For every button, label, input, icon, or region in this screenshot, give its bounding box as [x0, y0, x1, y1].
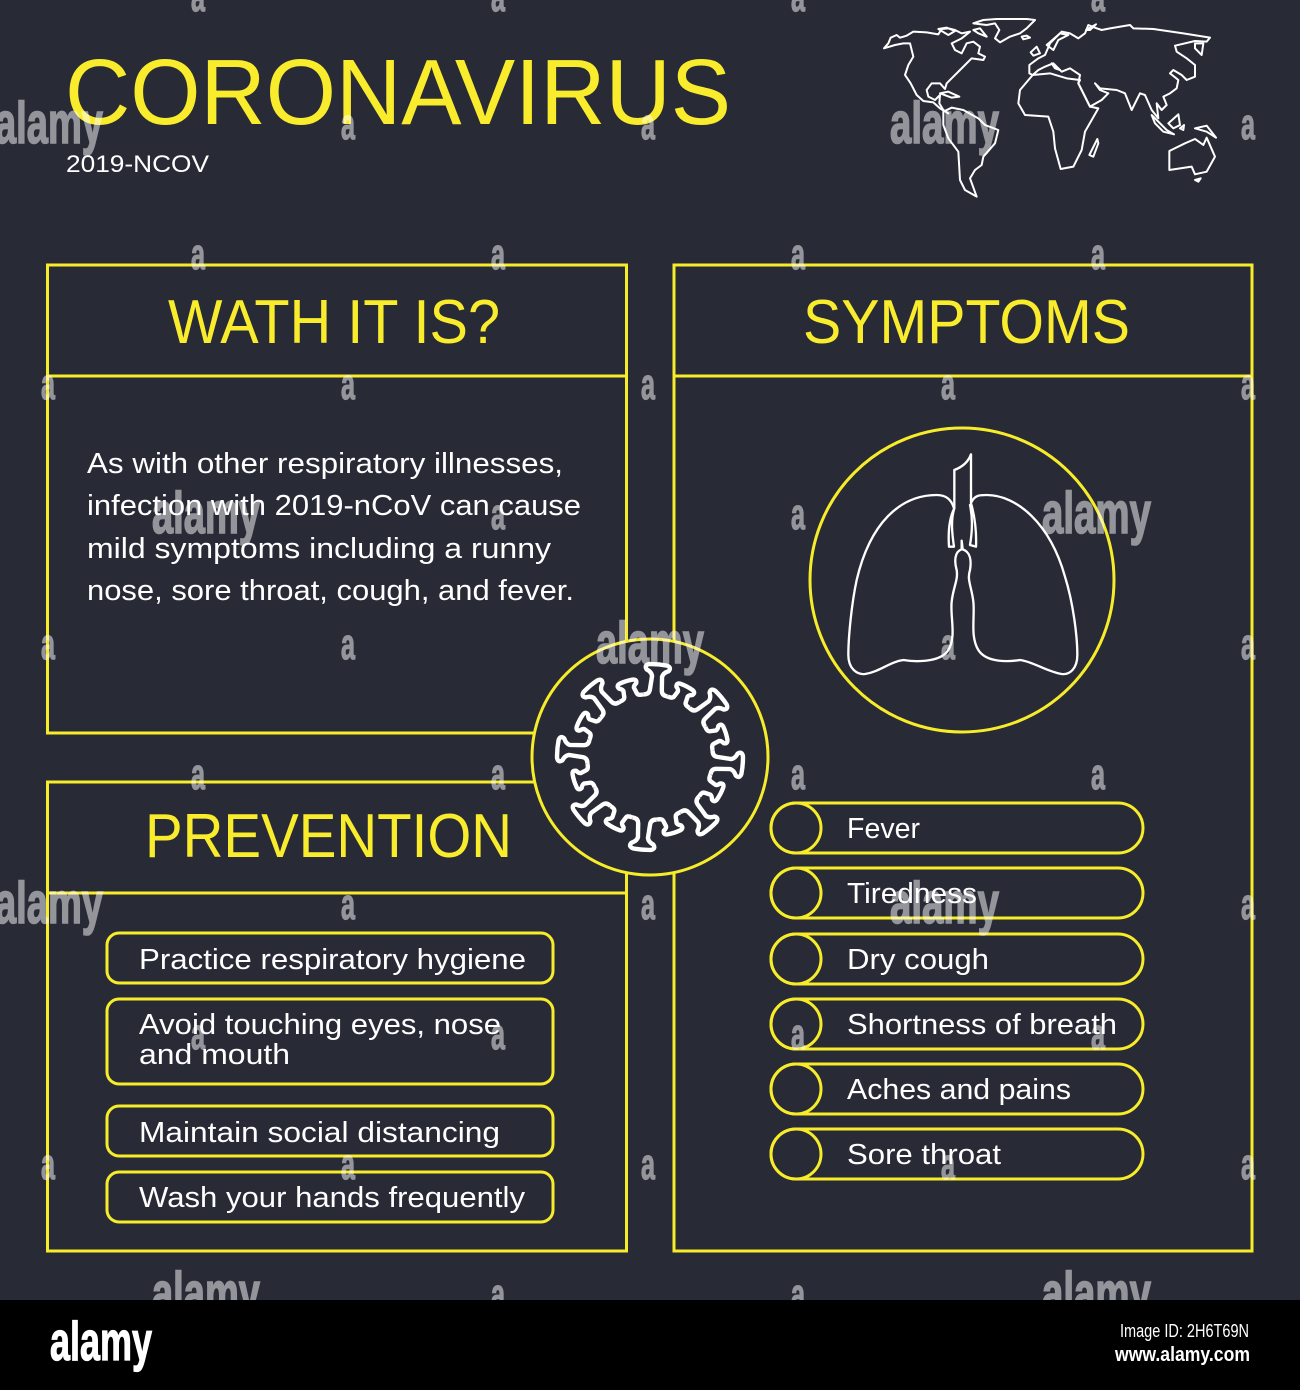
watermarks: a — [491, 1010, 505, 1059]
watermarks: a — [491, 490, 505, 539]
panel: what it is — [48, 265, 626, 733]
watermarks: a — [41, 1140, 55, 1189]
tip: avoid touching face — [107, 999, 553, 1084]
footer logo: alamy — [50, 1310, 152, 1372]
watermarks: alamy — [152, 481, 260, 546]
icon: virus in centre circle — [532, 639, 768, 875]
symptom: sore throat: Sore throat — [847, 1139, 1001, 1171]
image id: Image ID: 2H6T69N — [1120, 1321, 1249, 1341]
watermarks: a — [791, 230, 805, 279]
watermarks: a — [491, 1270, 505, 1319]
watermarks: a — [491, 230, 505, 279]
symptom: sore throat — [771, 1129, 1143, 1179]
watermarks: alamy — [1042, 1261, 1151, 1326]
symptom: fever: Fever — [847, 813, 920, 845]
tip: social distancing — [107, 1106, 553, 1156]
subtitle: 2019-NCOV — [66, 151, 209, 178]
symptom: tiredness — [771, 868, 1143, 918]
watermarks: a — [191, 230, 205, 279]
watermarks: a — [641, 1140, 655, 1189]
watermarks: a — [941, 360, 955, 409]
text block: description: As with other respiratory illnesses, — [87, 448, 563, 480]
text block: description: infection with 2019-nCoV can cause — [87, 490, 581, 522]
watermarks: alamy — [890, 91, 999, 156]
watermarks: a — [641, 360, 655, 409]
watermarks: a — [1091, 750, 1105, 799]
symptom: aches and pains — [771, 1064, 1143, 1114]
tip: respiratory hygiene — [107, 933, 553, 983]
heading: symptoms: SYMPTOMS — [803, 288, 1130, 357]
watermarks: a — [791, 750, 805, 799]
icon: world map — [884, 19, 1216, 197]
watermarks: a — [1091, 230, 1105, 279]
tip: social distancing: Maintain social distancing — [139, 1117, 500, 1149]
watermarks: a — [41, 360, 55, 409]
symptom: fever — [771, 803, 1143, 853]
watermarks: a — [941, 1140, 955, 1189]
tip: avoid touching face: and mouth — [139, 1039, 290, 1071]
heading: what it is: WATH IT IS? — [168, 288, 500, 357]
tip: avoid touching face: Avoid touching eyes, nose — [139, 1009, 501, 1041]
watermarks: alamy — [596, 611, 704, 676]
watermarks: a — [341, 620, 355, 669]
text block: description: nose, sore throat, cough, and fever. — [87, 575, 574, 607]
symptom: shortness of breath: Shortness of breath — [847, 1009, 1117, 1041]
watermarks: a — [641, 880, 655, 929]
watermarks: alamy — [1042, 481, 1151, 546]
watermarks: alamy — [152, 1261, 260, 1326]
watermarks: a — [1241, 1140, 1255, 1189]
title: CORONAVIRUS — [65, 40, 731, 144]
watermarks: a — [191, 750, 205, 799]
watermarks: a — [641, 100, 655, 149]
watermarks: a — [1091, 1010, 1105, 1059]
watermarks: a — [1241, 360, 1255, 409]
panel: prevention — [48, 782, 626, 1251]
panel: symptoms — [674, 265, 1252, 1251]
watermarks: a — [341, 100, 355, 149]
tip: respiratory hygiene: Practice respiratory hygiene — [139, 944, 526, 976]
footer bar — [0, 1300, 1300, 1390]
watermarks: a — [941, 620, 955, 669]
symptom: shortness of breath — [771, 999, 1143, 1049]
watermarks: a — [1241, 620, 1255, 669]
symptom: dry cough: Dry cough — [847, 944, 989, 976]
website: www.alamy.com — [1114, 1344, 1250, 1366]
watermarks: a — [491, 750, 505, 799]
watermarks: a — [791, 1010, 805, 1059]
tip: wash hands — [107, 1172, 553, 1222]
watermarks: a — [341, 1140, 355, 1189]
tip: wash hands: Wash your hands frequently — [139, 1182, 526, 1214]
heading: prevention: PREVENTION — [145, 802, 512, 871]
text block: description: mild symptoms including a runny — [87, 533, 552, 565]
watermarks: a — [191, 1010, 205, 1059]
symptom: tiredness: Tiredness — [847, 878, 977, 910]
text block: description — [87, 448, 581, 607]
watermarks: a — [341, 360, 355, 409]
icon: lungs in circle — [810, 428, 1114, 732]
watermarks: a — [341, 880, 355, 929]
watermarks: alamy — [890, 871, 999, 936]
watermarks: a — [1241, 100, 1255, 149]
watermarks: a — [791, 490, 805, 539]
symptom: dry cough — [771, 934, 1143, 984]
watermarks: a — [791, 1270, 805, 1319]
symptom: aches and pains: Aches and pains — [847, 1074, 1071, 1106]
watermarks: a — [41, 620, 55, 669]
watermarks: a — [1241, 880, 1255, 929]
